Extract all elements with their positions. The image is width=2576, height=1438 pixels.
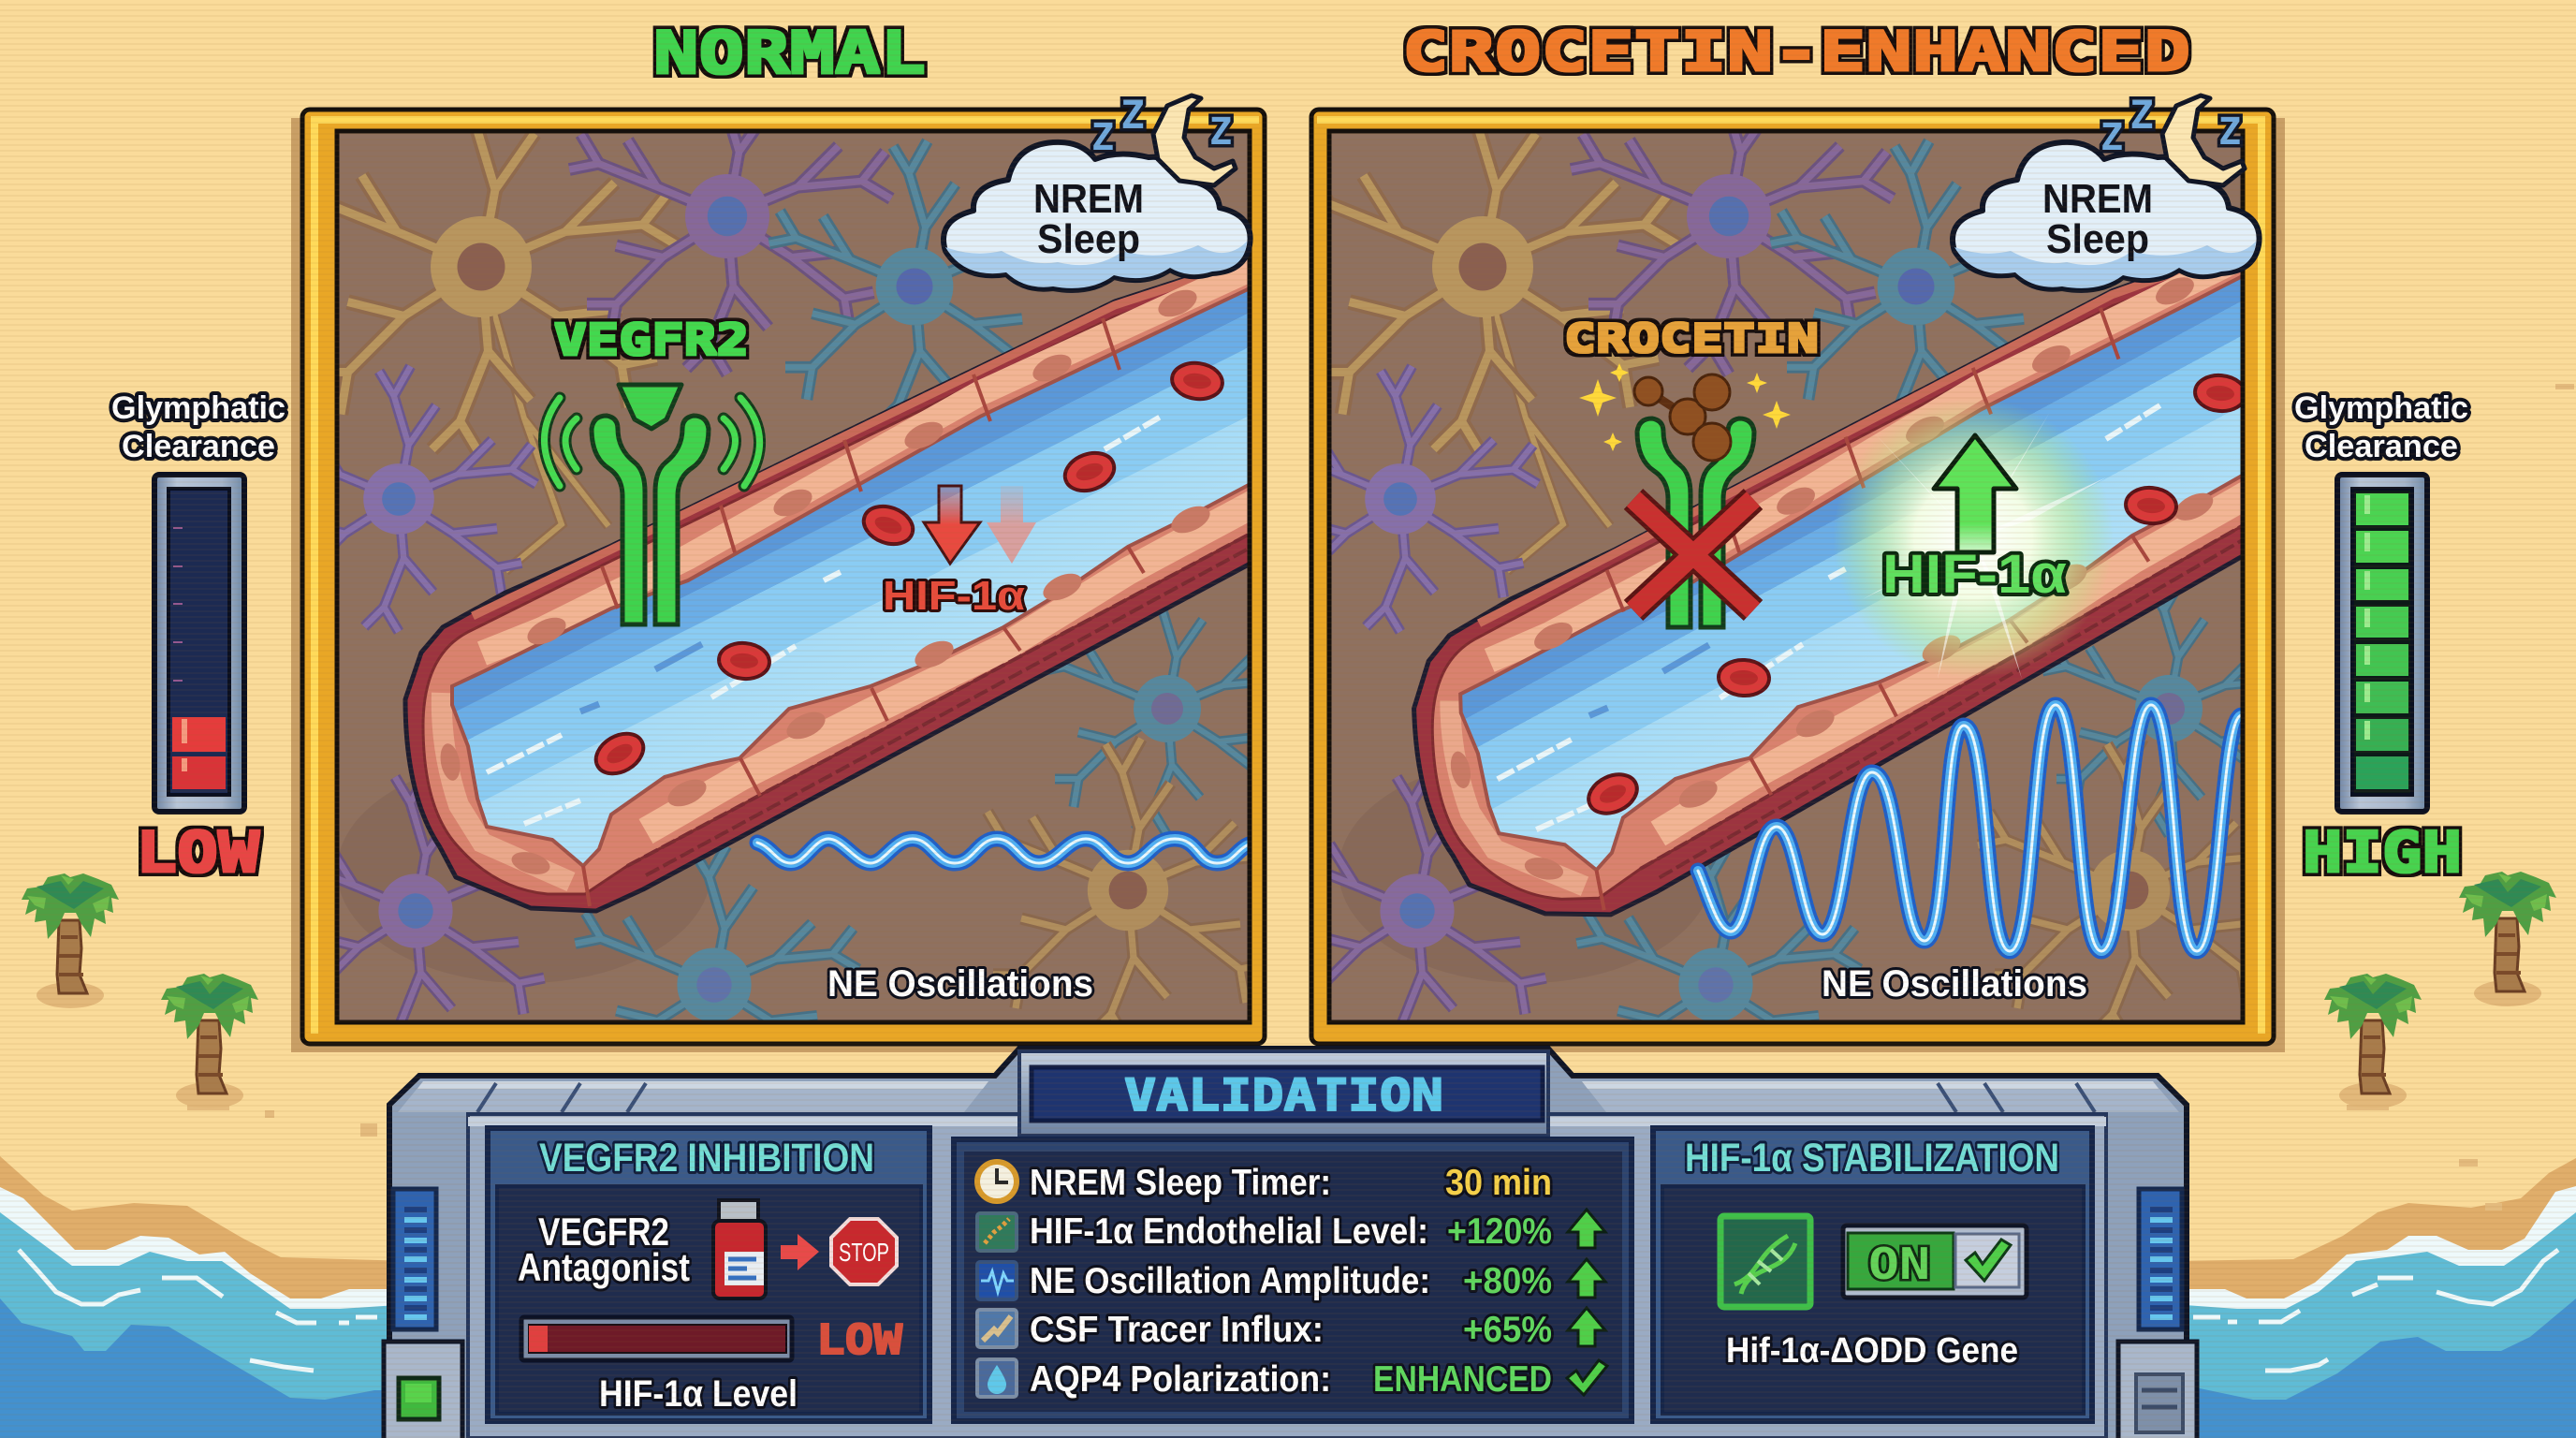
right glymphatic label: Clearance: [2305, 429, 2458, 464]
cloud: nrem sleep right: Z: [2218, 110, 2241, 154]
title: crocetin-enhanced: CROCETIN-ENHANCED: [1402, 20, 2190, 83]
icon: clock: [977, 1162, 1017, 1201]
icon: antagonist bottle: [713, 1200, 766, 1299]
hif-1a level bar: [521, 1317, 792, 1360]
left glymphatic label: Glymphatic: [111, 390, 285, 426]
validation tab: VALIDATION: [1124, 1070, 1443, 1122]
cloud: nrem sleep left: Z: [1120, 92, 1145, 138]
right gauge: high: [2337, 475, 2427, 812]
palm tree: [2459, 872, 2556, 1006]
high label: HIGH: [2303, 820, 2462, 886]
toggle: on: [1843, 1225, 2027, 1298]
cloud: nrem sleep right: Z: [2130, 92, 2154, 138]
arrows: hif-1a decreasing: [924, 486, 1036, 564]
icon: stop sign: [831, 1219, 897, 1284]
metric: ne oscillation amplitude: NE Oscillation Amplitude:: [1030, 1261, 1430, 1301]
title: normal: NORMAL: [653, 19, 926, 87]
icon: vegfr2 receptor with ligand: [545, 385, 760, 624]
icon: csf influx: [977, 1310, 1017, 1347]
palm tree: [161, 974, 258, 1108]
panel: vegfr2 inhibition: Antagonist: [518, 1245, 690, 1289]
right ornament: [2139, 1189, 2182, 1329]
cloud: nrem sleep left: Z: [1091, 116, 1114, 159]
cloud: nrem sleep left: [944, 92, 1251, 290]
hif-1a label low: HIF-1α: [883, 573, 1025, 619]
arrow up: [1568, 1210, 1605, 1248]
cloud: nrem sleep left: NREM: [1033, 176, 1144, 222]
cloud: nrem sleep left: Sleep: [1037, 216, 1140, 262]
cloud: nrem sleep right: [1953, 92, 2260, 290]
metric: csf tracer influx: CSF Tracer Influx:: [1030, 1310, 1324, 1350]
panel: hif-1a stabilization: HIF-1α STABILIZATION: [1685, 1136, 2059, 1181]
metric: nrem sleep timer: NREM Sleep Timer:: [1030, 1163, 1331, 1203]
panel: metrics: [954, 1139, 1632, 1421]
icon: wave: [977, 1262, 1017, 1299]
ne oscillation wave: high amplitude: [1698, 705, 2242, 951]
panel: vegfr2 inhibition: VEGFR2: [538, 1210, 669, 1254]
arrow up: [1568, 1259, 1605, 1298]
cloud: nrem sleep right: Sleep: [2046, 216, 2149, 262]
cloud: nrem sleep left: Z: [1209, 110, 1232, 154]
panel: vegfr2 inhibition: HIF-1α Level: [599, 1373, 798, 1415]
icon: dna: [1720, 1216, 1810, 1307]
arrow to stop: [781, 1234, 819, 1270]
palm tree: [22, 873, 119, 1008]
ne oscillations label left: NE Oscillations: [827, 963, 1093, 1005]
icon: blocked receptor with crocetin molecule: [1579, 363, 1791, 627]
panel: crocetin-enhanced: [1309, 107, 2285, 1052]
panel: vegfr2 inhibition: VEGFR2 INHIBITION: [539, 1136, 874, 1181]
arrow up: [1568, 1308, 1605, 1346]
left glymphatic label: [111, 390, 285, 464]
icon: water drop: [977, 1359, 1017, 1397]
green glow with up arrow: [1833, 398, 2114, 679]
validation tab: [1019, 1051, 1548, 1136]
sand pebbles: [187, 384, 2574, 1211]
left ornament: [393, 1189, 436, 1329]
panel: metrics: ENHANCED: [1373, 1359, 1552, 1400]
panel: vegfr2 inhibition: [488, 1128, 929, 1421]
crocetin label: CROCETIN: [1564, 315, 1819, 361]
cloud: nrem sleep right: Z: [2100, 116, 2123, 159]
panel: metrics: +65%: [1463, 1310, 1552, 1350]
vegfr2 label: VEGFR2: [554, 315, 749, 365]
right vent box: [2118, 1342, 2197, 1438]
cloud: nrem sleep right: NREM: [2042, 176, 2153, 222]
ne oscillations label right: NE Oscillations: [1822, 963, 2087, 1005]
toggle: on: ON: [1868, 1239, 1930, 1289]
left gauge: low: [154, 475, 244, 812]
right glymphatic label: Glymphatic: [2294, 390, 2468, 426]
panel: hif-1a stabilization: Hif-1α-ΔODD Gene: [1726, 1331, 2018, 1371]
metric: hif-1a endothelial level: HIF-1α Endothelial Level:: [1030, 1211, 1428, 1252]
panel: metrics: 30 min: [1445, 1163, 1552, 1203]
metric: aqp4 polarization: AQP4 Polarization:: [1030, 1359, 1331, 1400]
icon: hif chart: [977, 1213, 1017, 1251]
right shoreline: [2172, 1158, 2576, 1438]
hif-1a label high: HIF-1α: [1882, 544, 2067, 605]
low small label: LOW: [816, 1316, 903, 1364]
panel: hif-1a stabilization: [1653, 1128, 2092, 1421]
panel: metrics: +80%: [1463, 1261, 1552, 1301]
left shoreline: [0, 1156, 412, 1438]
validation console: [384, 1049, 2197, 1438]
right glymphatic label: [2294, 390, 2468, 464]
panel: metrics: +120%: [1447, 1211, 1552, 1252]
left button box: [384, 1342, 462, 1438]
icon: stop sign: STOP: [839, 1238, 889, 1267]
palm tree: [2324, 974, 2422, 1108]
low label: LOW: [136, 820, 260, 886]
left glymphatic label: Clearance: [122, 429, 275, 464]
ne oscillation wave: low amplitude: [757, 839, 1254, 863]
panel: normal: [291, 107, 1267, 1052]
check mark: [1567, 1360, 1607, 1395]
